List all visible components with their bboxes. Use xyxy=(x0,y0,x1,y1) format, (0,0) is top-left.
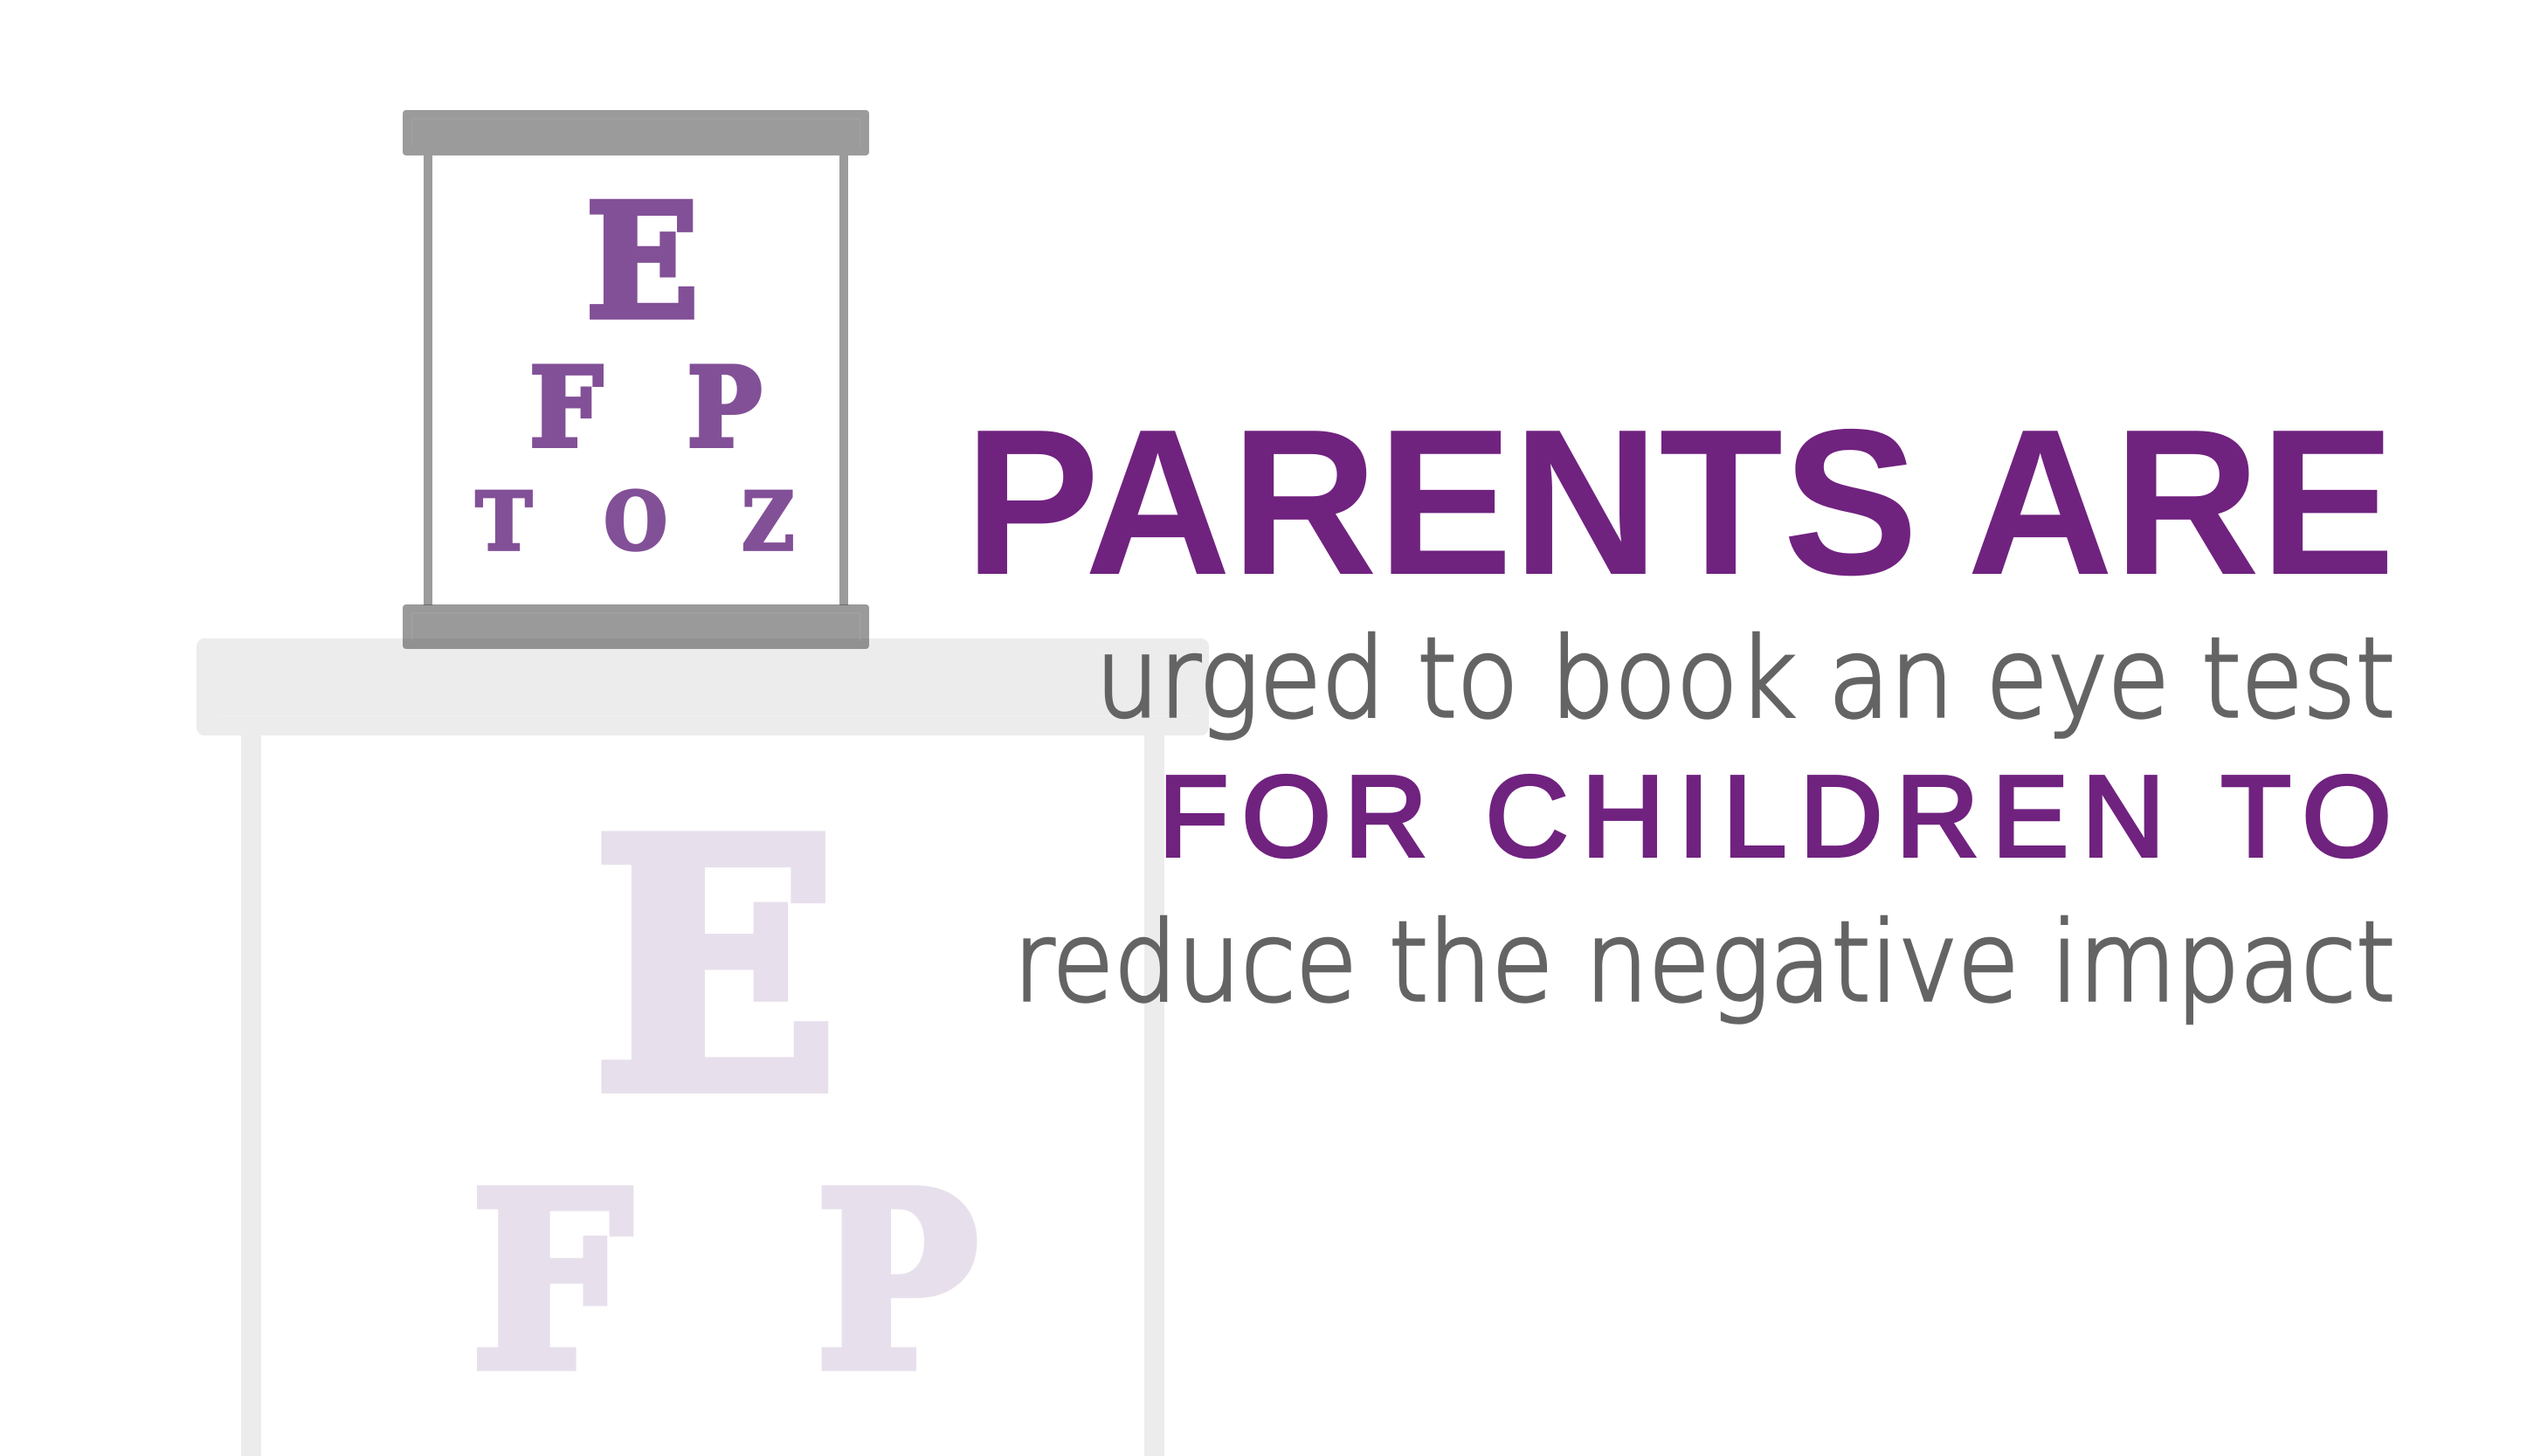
letter O: O xyxy=(604,475,667,569)
letter T: T xyxy=(475,475,532,569)
faded chart right post xyxy=(1144,729,1164,1456)
faded letter E: E xyxy=(592,766,839,1168)
chart bottom bar xyxy=(403,604,869,649)
chart right post xyxy=(839,155,848,605)
chart left post xyxy=(424,155,432,605)
chart top bar xyxy=(403,110,869,155)
large faded eye chart xyxy=(197,638,1209,1456)
headline: parents are: PARENTS ARE xyxy=(964,387,2395,618)
headline: for children to: FOR CHILDREN TO xyxy=(1158,752,2392,880)
faded chart top bar xyxy=(197,638,1209,735)
faded letter P: P xyxy=(816,1140,978,1424)
headline text block xyxy=(964,387,2395,1026)
letter Z: Z xyxy=(742,476,794,569)
faded letter F: F xyxy=(471,1141,632,1424)
letter P: P xyxy=(687,343,762,473)
small eye chart xyxy=(403,110,869,649)
letter F: F xyxy=(529,342,603,472)
faded chart left post xyxy=(241,729,261,1456)
subline: urged to book an eye test: urged to book an eye test xyxy=(1095,614,2395,742)
subline: reduce the negative impact: reduce the negative impact xyxy=(1013,898,2395,1026)
letter E: E xyxy=(585,170,699,354)
